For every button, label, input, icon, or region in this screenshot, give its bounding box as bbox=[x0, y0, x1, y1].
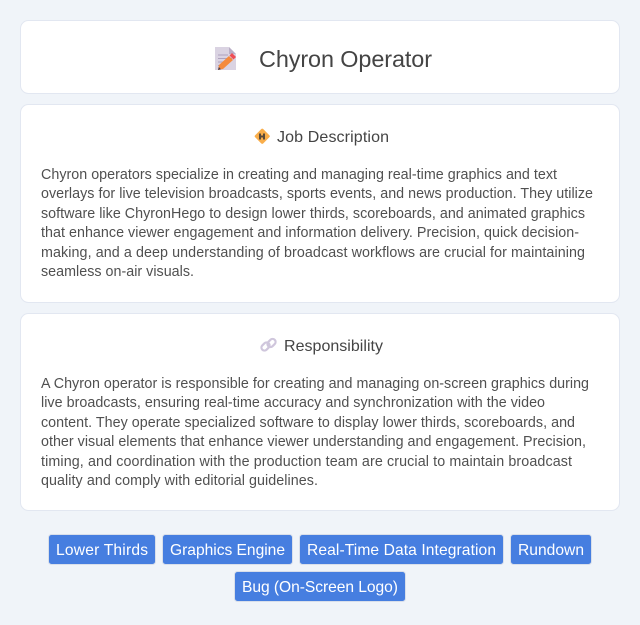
text block: job description: that enhance viewer engagement and information delivery. Precision, quick decision- bbox=[41, 225, 579, 241]
panel: job description bbox=[20, 104, 620, 302]
tag: graphics engine bbox=[162, 534, 292, 564]
panel: title card bbox=[20, 20, 620, 94]
tag: real-time data integration bbox=[300, 534, 504, 564]
text block: responsibility: quality and comply with editorial guidelines. bbox=[41, 473, 318, 489]
text block: responsibility bbox=[41, 376, 589, 489]
icon: chain link bbox=[260, 338, 277, 352]
tag: lower thirds bbox=[48, 534, 156, 564]
text block: responsibility: live broadcasts, ensuring real-time accuracy and synchronization with the video bbox=[41, 395, 545, 411]
text block: job description: Chyron operators specialize in creating and managing real-time graphics and text bbox=[41, 167, 557, 183]
text block: job description bbox=[41, 167, 593, 280]
tag: rundown: Rundown bbox=[518, 542, 584, 559]
text block: responsibility: content. They operate specialized software to display lower thirds, scoreboards, and bbox=[41, 415, 575, 431]
text block: job description: making, and a deep understanding of broadcast workflows are crucial for maintaining bbox=[41, 245, 585, 261]
tag: bug bbox=[234, 572, 406, 602]
heading: job description: Job Description bbox=[277, 129, 389, 146]
tag: bug: Bug (On-Screen Logo) bbox=[242, 579, 398, 596]
text block: responsibility: A Chyron operator is responsible for creating and managing on-screen graphics during bbox=[41, 376, 589, 392]
text block: job description: seamless on-air visuals. bbox=[41, 264, 194, 280]
icon: orange diamond sign bbox=[254, 128, 270, 144]
text block: job description: software like ChyronHego to design lower thirds, scoreboards, and animated graphics bbox=[41, 206, 585, 222]
text block: responsibility: timing, and coordination with the production team are crucial to maintain broadcast bbox=[41, 454, 572, 470]
title: Chyron Operator bbox=[259, 46, 432, 72]
heading: responsibility: Responsibility bbox=[284, 338, 383, 355]
tag: real-time data integration: Real-Time Data Integration bbox=[307, 542, 496, 559]
text block: job description: overlays for live television broadcasts, sports events, and news production. They utilize bbox=[41, 186, 593, 202]
icon: memo with pencil bbox=[215, 47, 236, 70]
tag: rundown bbox=[510, 534, 592, 564]
text block: responsibility: other visual elements that enhance viewer understanding and engagement. Precision, bbox=[41, 434, 586, 450]
tag: graphics engine: Graphics Engine bbox=[170, 542, 285, 559]
keyword tags bbox=[48, 534, 592, 602]
tag: lower thirds: Lower Thirds bbox=[56, 542, 148, 559]
panel: responsibility bbox=[20, 314, 620, 510]
